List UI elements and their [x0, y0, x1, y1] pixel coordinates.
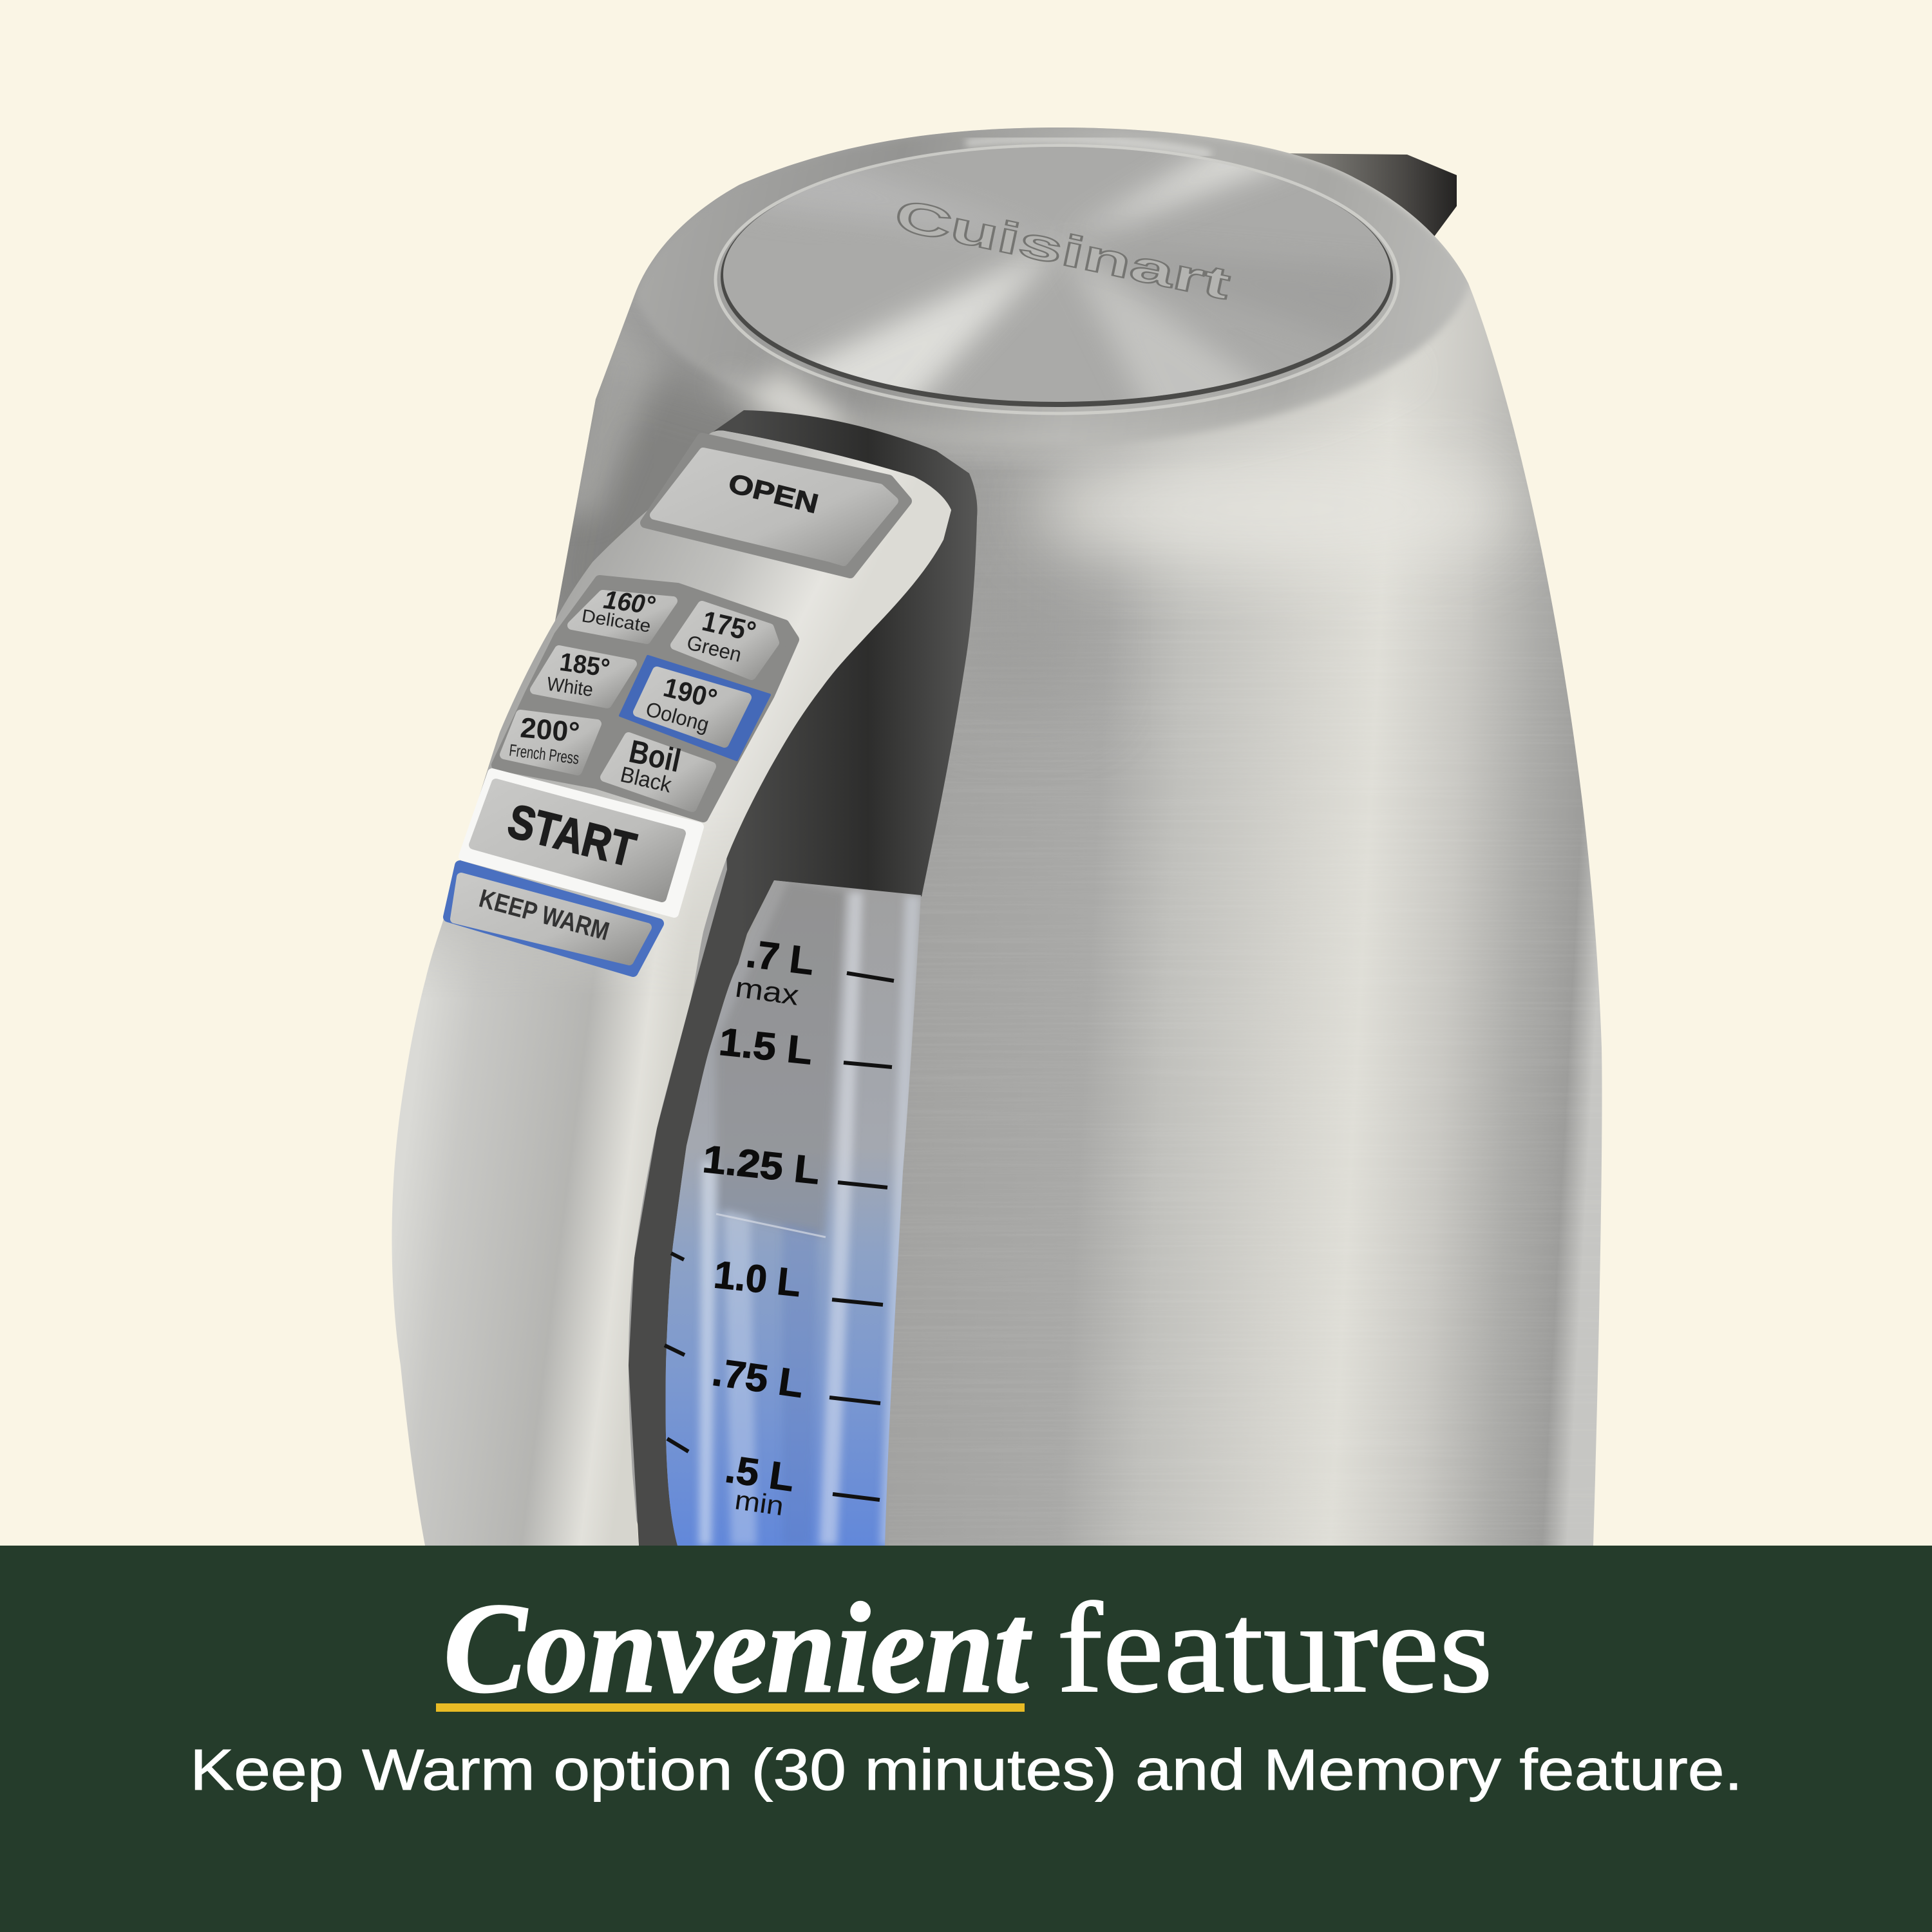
volume labels: min: [733, 1484, 786, 1521]
title: Convenient: [444, 1577, 1032, 1719]
button: 175 green: 175°: [699, 605, 759, 648]
volume tick marks: [665, 973, 894, 1500]
kettle body: [555, 128, 1602, 1546]
subtitle: Keep Warm option (30 minutes) and Memory feature.: [190, 1738, 1743, 1803]
control panel: [448, 438, 907, 972]
lid seat shadow: [721, 147, 1393, 407]
button: 175 green: [675, 605, 775, 676]
kettle lid: [723, 147, 1390, 402]
start button: [463, 773, 699, 913]
handle dark grommet: [629, 410, 978, 1546]
open button: OPEN: [725, 468, 822, 519]
volume labels: max: [734, 971, 800, 1012]
kettle spout rear: [1281, 153, 1457, 238]
temperature button recess: [497, 580, 794, 817]
lid seat lip: [715, 146, 1398, 413]
volume labels: 1.5 L: [717, 1020, 815, 1073]
handle silver shell: [392, 431, 951, 1546]
button: 160 delicate: 160°: [602, 585, 657, 620]
keep warm button: [448, 866, 659, 972]
button: 185 white: [535, 648, 632, 704]
button: 200 french press: 200°: [519, 712, 581, 748]
button: 200 french press: French Press: [508, 740, 580, 768]
button: 185 white: White: [545, 674, 594, 701]
keep warm button: KEEP WARM: [476, 884, 612, 946]
volume labels: [701, 932, 822, 1521]
button: 190 oolong selected: 190°: [661, 672, 720, 714]
button: 185 white: 185°: [558, 648, 612, 683]
button: 175 green: Green: [685, 630, 744, 667]
button: 190 oolong selected: Oolong: [643, 697, 712, 736]
volume labels: .75 L: [710, 1350, 806, 1406]
volume labels: .7 L: [744, 932, 817, 983]
volume labels: 1.0 L: [712, 1253, 803, 1305]
kettle top rim: [634, 128, 1472, 446]
kettle product illustration: [392, 128, 1610, 1558]
button: 200 french press: [504, 712, 597, 771]
water window: [665, 880, 921, 1546]
open button recess: [645, 438, 907, 573]
open button: [654, 452, 894, 562]
volume labels: 1.25 L: [701, 1137, 822, 1192]
handle upper brushed area: [430, 430, 951, 963]
bottom caption band: [0, 1546, 1932, 1932]
title second word: features: [1057, 1577, 1493, 1719]
start button: START: [503, 794, 641, 876]
button: 160 delicate: Delicate: [580, 605, 652, 636]
button: boil black: Boil: [626, 733, 684, 779]
title underline: [436, 1703, 1025, 1712]
button: boil black: Black: [618, 762, 674, 798]
button: 160 delicate: [572, 585, 673, 639]
volume labels: .5 L: [723, 1447, 797, 1499]
button: boil black: [605, 733, 712, 808]
button: 190 oolong selected: [620, 656, 770, 760]
lid logo text: Cuisinart: [891, 191, 1235, 309]
